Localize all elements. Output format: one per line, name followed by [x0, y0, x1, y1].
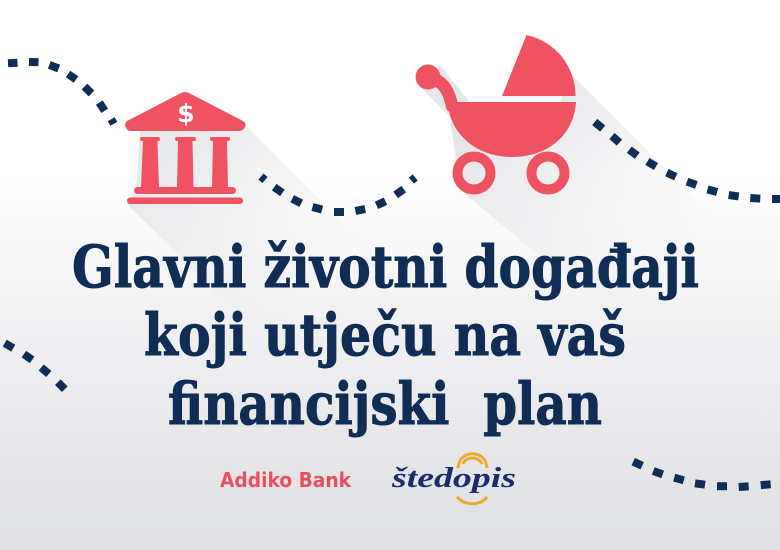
- long shadow: stroller: [420, 65, 720, 323]
- bank ground bar: [127, 198, 243, 204]
- bank base: [134, 187, 236, 194]
- stroller handle: [428, 77, 452, 106]
- stroller canopy: [502, 35, 576, 96]
- štedopis top arc: [458, 454, 487, 468]
- štedopis wordmark: štedopis: [391, 463, 516, 494]
- stroller basket: [447, 102, 576, 157]
- decorative dashed route: right: [595, 122, 780, 199]
- decorative dashed route: lower left: [5, 343, 65, 389]
- dollar sign: $: [177, 99, 195, 128]
- decorative dashed route: lower right: [633, 462, 771, 487]
- logo: Addiko Bank: Addiko Bank: [220, 468, 352, 492]
- decorative dashed route: middle: [261, 177, 415, 212]
- štedopis bottom arc: [457, 497, 487, 504]
- title line 3: financijski plan: [168, 370, 602, 438]
- decorative dashed route: top left: [8, 62, 114, 124]
- stroller handle grip: [416, 64, 440, 90]
- icon: bank: [125, 92, 246, 204]
- bank columns: [140, 137, 230, 187]
- logo: štedopis: [391, 454, 516, 504]
- stroller right wheel: [532, 156, 564, 190]
- icon: baby stroller: [416, 35, 576, 190]
- long shadow: bank: [127, 125, 395, 354]
- stroller left wheel: [458, 156, 490, 190]
- title line 2: koji utječu na vaš: [144, 301, 626, 369]
- title: [72, 233, 699, 438]
- bank roof: [125, 92, 246, 131]
